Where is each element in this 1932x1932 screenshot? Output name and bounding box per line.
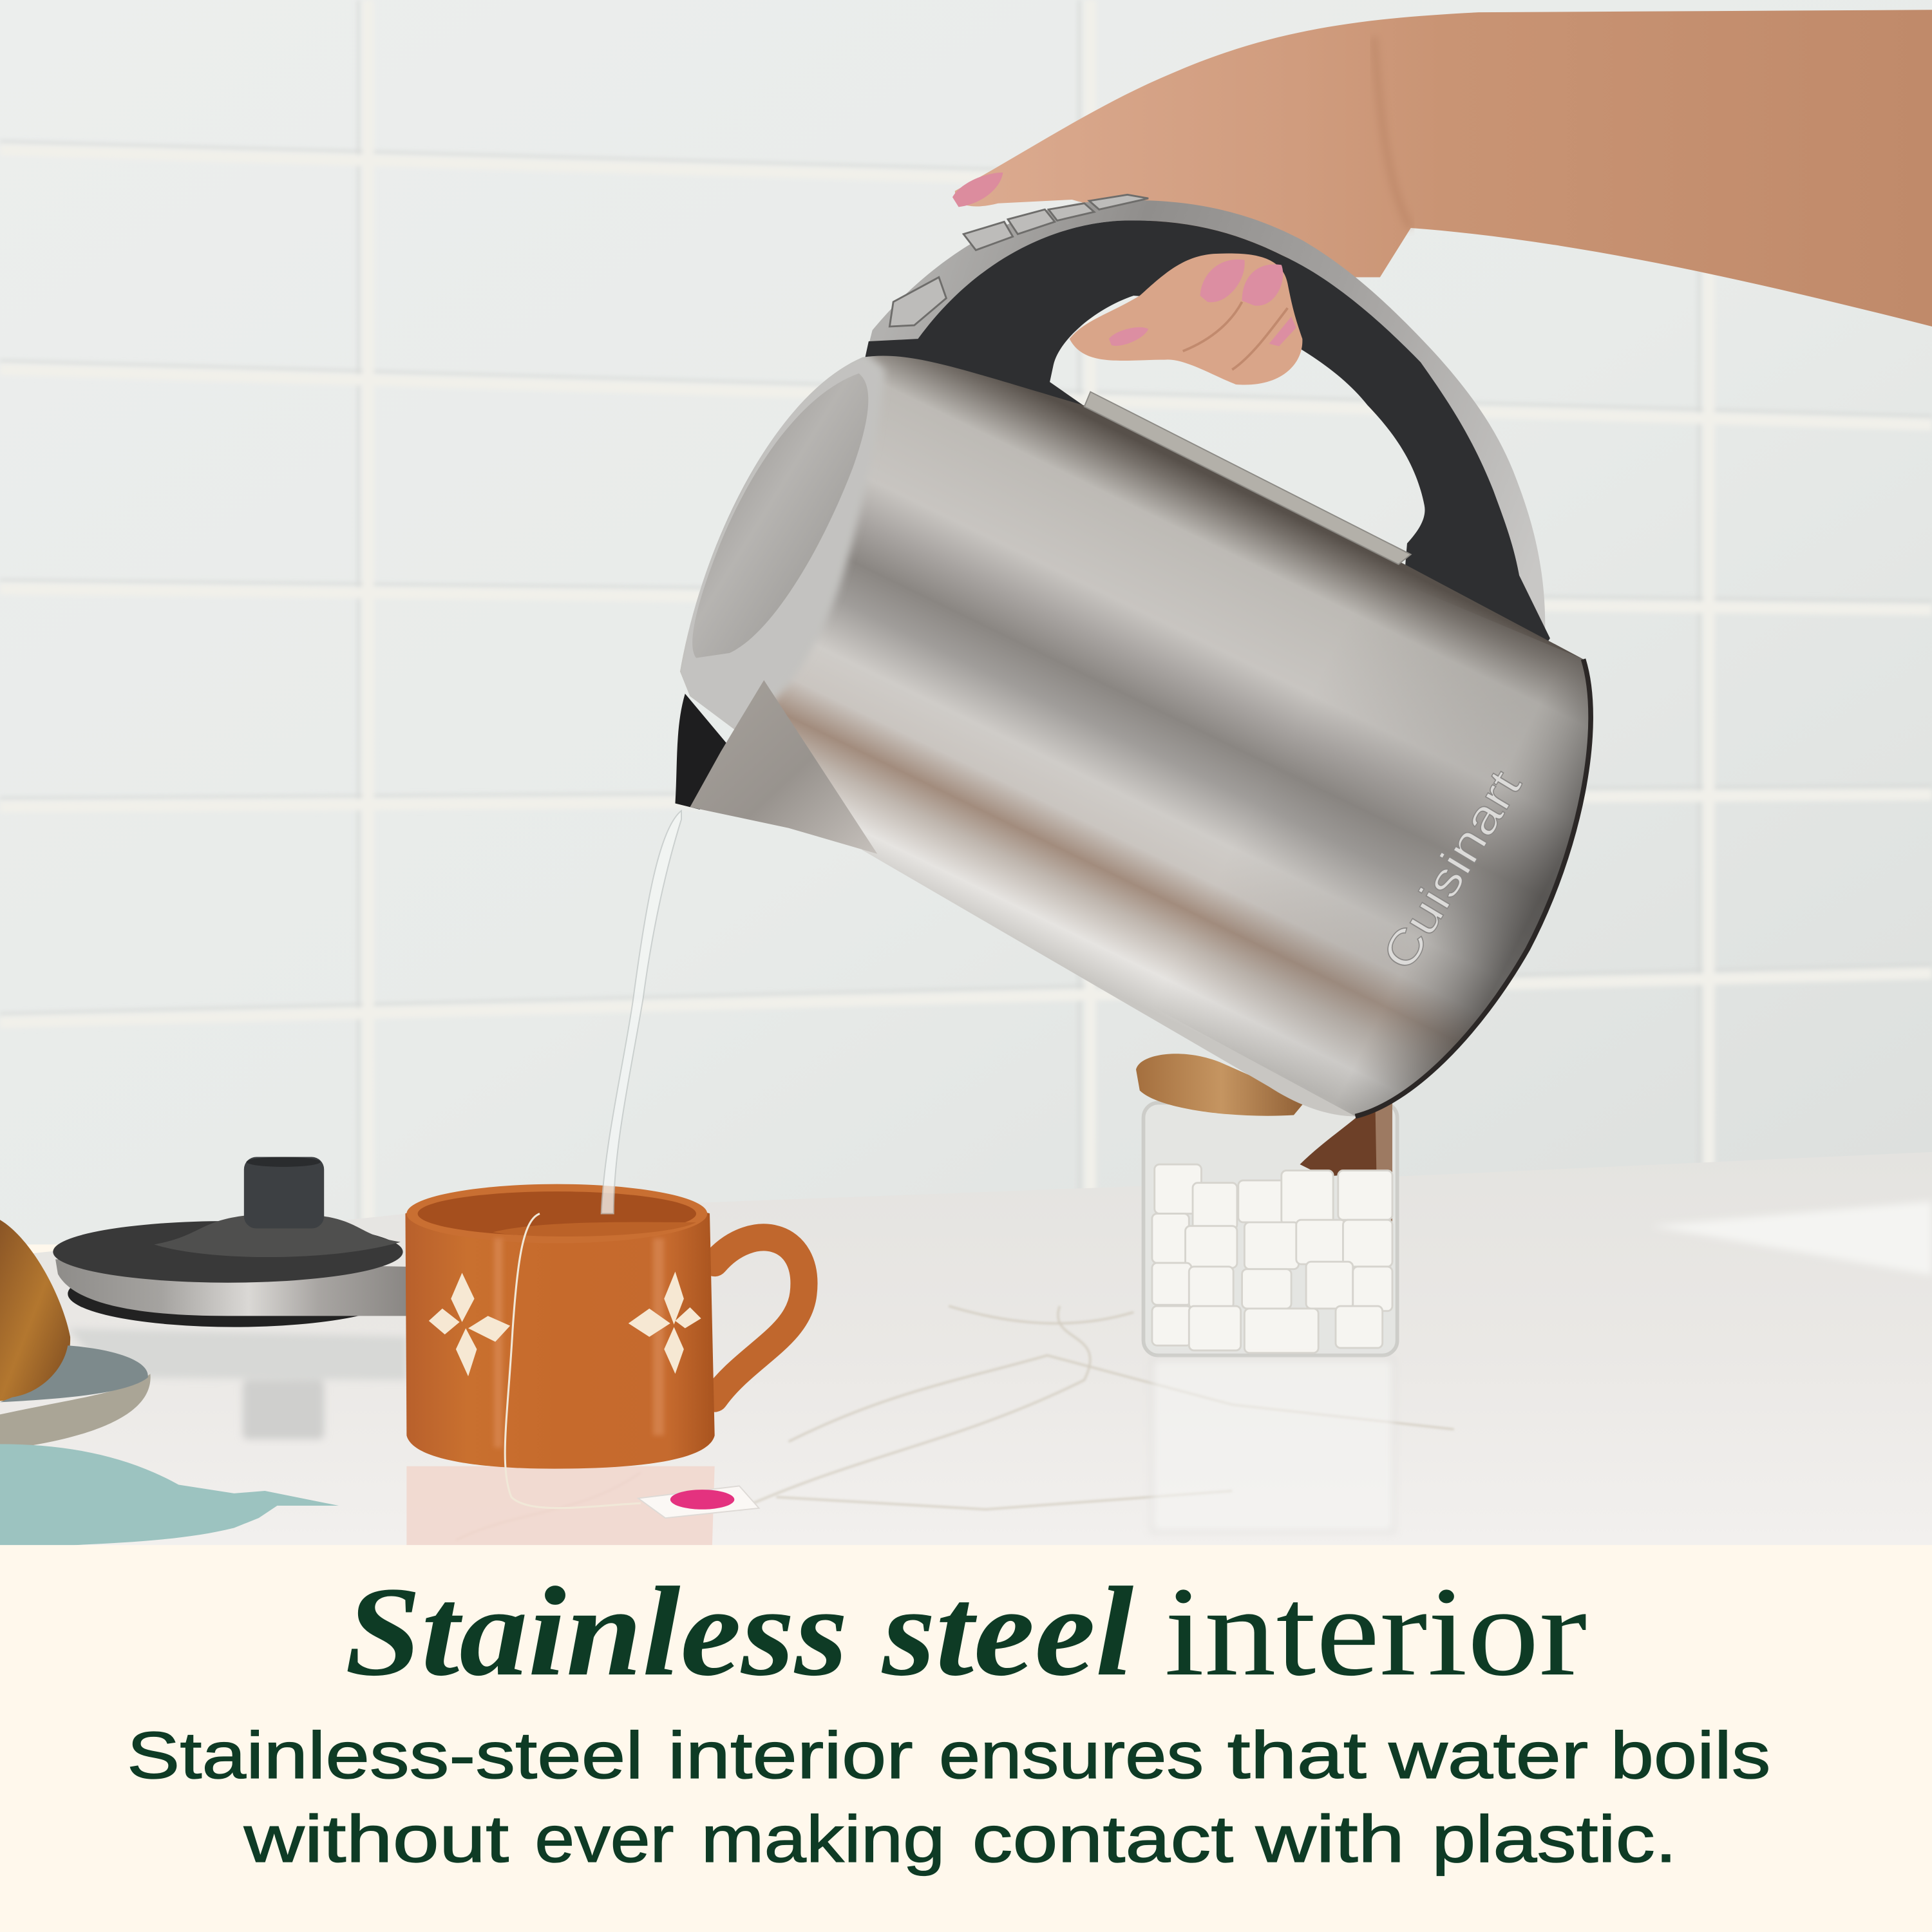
wooden jar lid: [1136, 1054, 1306, 1116]
shading near kettle base: [1208, 627, 1588, 1116]
bread loaf: [0, 1220, 70, 1401]
body text: water: [1388, 1718, 1588, 1792]
mug flower pattern right: [629, 1271, 701, 1374]
kettle base lid with knob: [53, 1157, 406, 1327]
sugar cubes: [1152, 1164, 1392, 1353]
body text: contact: [972, 1801, 1233, 1876]
body text: without: [243, 1801, 509, 1876]
kettle control buttons: [889, 194, 1148, 327]
body text: with: [1255, 1801, 1405, 1876]
kettle pour spout: [690, 680, 877, 854]
mug highlights: [494, 1238, 664, 1448]
body text: ever: [535, 1801, 674, 1876]
heading: interior: [1164, 1561, 1587, 1703]
panel: kitchen photo scene: [0, 0, 1932, 1545]
body text: [127, 1718, 1770, 1876]
kettle handle silver band: [869, 200, 1545, 634]
tiled wall background: [0, 0, 1932, 1244]
jar of sugar cubes: [1136, 1054, 1397, 1356]
water stream: [601, 811, 681, 1214]
heading: Stainless steel: [345, 1561, 1133, 1703]
kettle spout interior: [675, 694, 730, 810]
orange mug: [405, 1184, 804, 1469]
body text: plastic.: [1432, 1801, 1677, 1876]
panel: caption background: [0, 1545, 1932, 1932]
mug reflection on counter: [406, 1466, 715, 1545]
embossed brand name: Cuisinart: [1372, 762, 1531, 979]
heading: [345, 1561, 1587, 1703]
kettle handle black grip: [862, 220, 1550, 653]
fingernails: [1109, 260, 1296, 346]
marble countertop: [0, 1152, 1932, 1545]
index fingernail: [952, 173, 1003, 207]
body text: boils: [1611, 1718, 1770, 1792]
mug flower pattern left: [429, 1273, 510, 1376]
body text: ensures: [939, 1718, 1204, 1792]
kettle main body: [680, 355, 1591, 1116]
kettle top collar: [673, 350, 885, 733]
kettle top disc: [692, 374, 868, 658]
body text: interior: [668, 1718, 913, 1792]
body text: that: [1227, 1718, 1367, 1792]
finger creases: [1183, 302, 1287, 370]
body text: making: [701, 1801, 945, 1876]
reflection of kettle base on counter: [68, 1328, 406, 1439]
fingers gripping handle: [1070, 254, 1302, 385]
mug handle: [715, 1237, 804, 1399]
arm and hand: [952, 10, 1932, 327]
jar reflection on counter: [1152, 1359, 1394, 1531]
teal napkin: [0, 1444, 339, 1545]
body text: Stainless-steel: [127, 1718, 643, 1792]
plate: [0, 1345, 151, 1450]
tea bag string and tag: [505, 1214, 759, 1518]
measuring window: [1084, 392, 1411, 564]
electric kettle: [673, 194, 1591, 1116]
kettle base dark rim: [1356, 659, 1591, 1116]
